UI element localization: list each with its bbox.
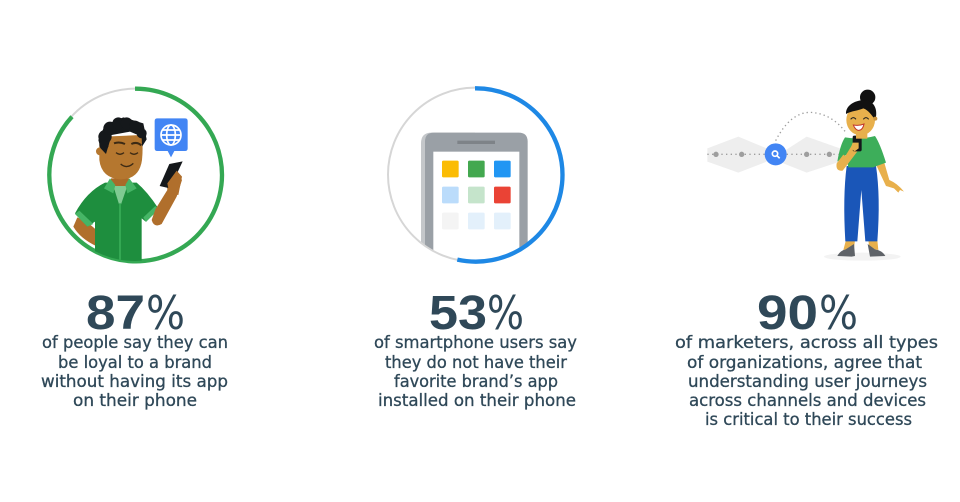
stat: 90%: %	[819, 286, 858, 340]
description: 87% stat: be loyal to a brand	[58, 353, 212, 372]
stat: 90%: 90	[757, 287, 818, 340]
stat: 53%: 53	[429, 287, 487, 340]
woman figure	[824, 90, 904, 261]
description: 90% stat: across channels and devices	[689, 391, 926, 410]
panel: 53% no favorite brand app	[374, 88, 577, 410]
description: 53% stat: favorite brand’s app	[394, 372, 558, 391]
illustration: woman and user journey	[707, 90, 904, 261]
description: 53% stat	[374, 333, 577, 410]
description: 53% stat: of smartphone users say	[374, 333, 577, 352]
description: 90% stat: is critical to their success	[705, 410, 912, 429]
stat: 90%	[757, 286, 858, 340]
description: 90% stat	[675, 333, 938, 429]
description: 90% stat: of organizations, agree that	[687, 353, 923, 372]
stat: 53%: %	[487, 286, 524, 340]
ring gauge 87%	[49, 89, 222, 261]
description: 90% stat: of marketers, across all types	[675, 333, 938, 352]
stat: 87%: %	[146, 286, 185, 340]
man figure	[73, 117, 183, 263]
phone with app grid	[421, 132, 528, 250]
description: 87% stat: on their phone	[73, 391, 197, 410]
panel: 90% marketers user journeys	[675, 90, 938, 429]
illustration: phone in blue ring	[388, 88, 562, 268]
icon: globe speech bubble	[155, 118, 188, 157]
illustration: man with phone in green ring	[49, 89, 222, 263]
stat: 87%	[86, 286, 185, 340]
stat: 87%: 87	[86, 287, 145, 340]
description: 53% stat: they do not have their	[385, 353, 567, 372]
ring gauge 53%	[388, 88, 562, 262]
journey path with search node	[707, 112, 846, 173]
description: 53% stat: installed on their phone	[378, 391, 576, 410]
description: 87% stat: without having its app	[41, 372, 228, 391]
stat: 53%	[429, 286, 524, 340]
panel: 87% loyal without app	[41, 89, 228, 410]
description: 87% stat: of people say they can	[42, 333, 228, 352]
description: 87% stat	[41, 333, 228, 410]
description: 90% stat: understanding user journeys	[688, 372, 927, 391]
